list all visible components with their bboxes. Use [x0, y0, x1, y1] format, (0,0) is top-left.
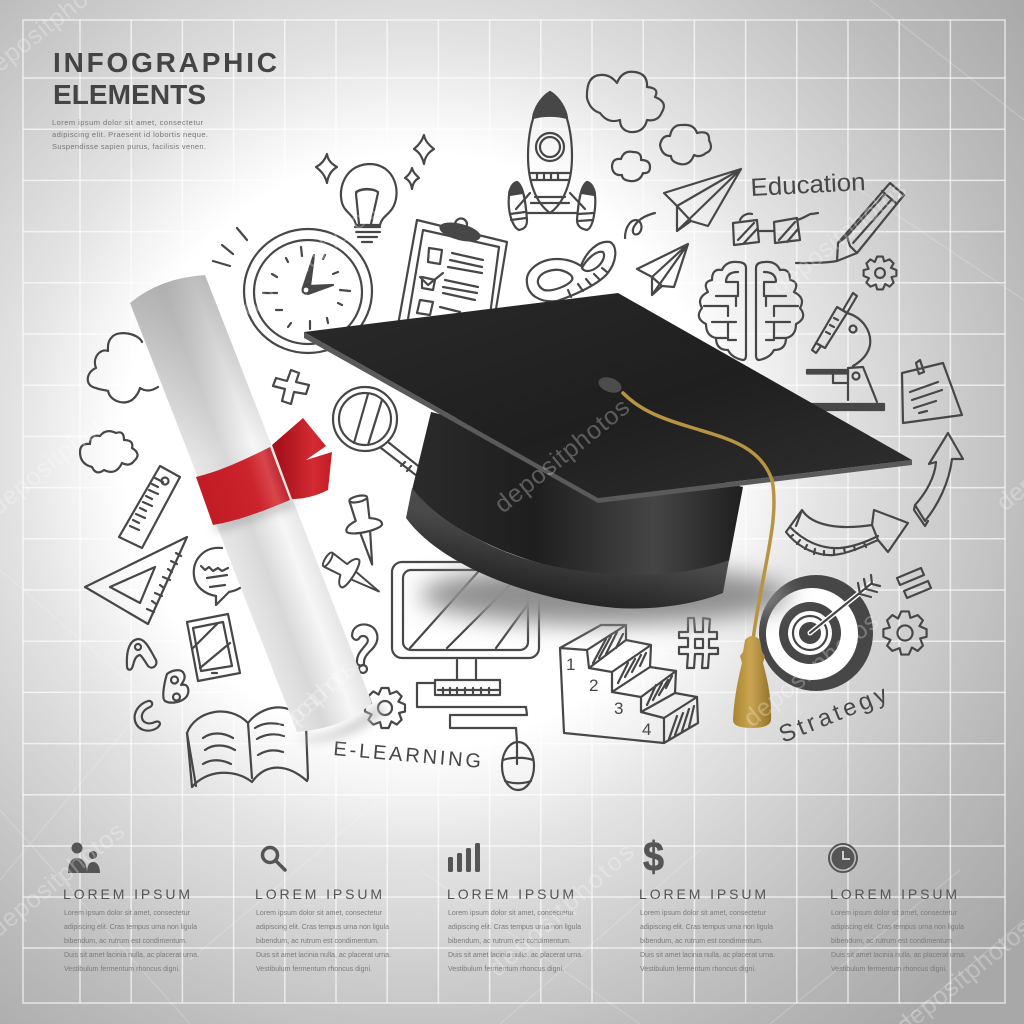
column 2: [255, 848, 391, 973]
heading 4: LOREM IPSUM: [639, 886, 766, 902]
icon: rocket: [509, 92, 595, 230]
icon: clock small: [829, 844, 857, 872]
intro text: Suspendisse sapien purus, facilisis venen.: [52, 142, 206, 151]
column 1: [63, 842, 199, 973]
heading 3: LOREM IPSUM: [447, 886, 574, 902]
body text 2: adipiscing elit. Cras tempus urna non ligula: [256, 924, 389, 931]
icon: cloud left: [88, 333, 158, 402]
cap body: [412, 412, 743, 577]
icon: paper plane large: [664, 169, 741, 231]
step numbers: 3: [614, 699, 623, 718]
cap board edge: [304, 332, 912, 503]
cap shadow: [420, 565, 790, 625]
body text 4: [640, 910, 775, 973]
icon: letter C: [135, 701, 160, 731]
body text 5: Lorem ipsum dolor sit amet, consectetur: [831, 910, 958, 917]
icon: sparkle top: [414, 135, 434, 164]
body text 3: adipiscing elit. Cras tempus urna non ligula: [448, 924, 581, 931]
body text 2: [256, 910, 391, 973]
icon: squiggle: [625, 213, 655, 238]
icon: dollar: $: [643, 833, 664, 880]
icon: pencil: [796, 183, 904, 263]
icon: cloud medium: [660, 125, 711, 164]
icon: push pin upright: [340, 492, 390, 568]
watermarks: depositphotos: [738, 607, 884, 733]
icon: gear right: [883, 611, 927, 655]
icon: glasses: [733, 213, 818, 245]
Education label: Education: [750, 168, 866, 202]
E-LEARNING label: E-LEARNING: [333, 738, 482, 773]
watermarks: depositphotos: [236, 197, 382, 323]
body text 5: bibendum, ac rutrum est condimentum.: [831, 938, 954, 945]
icon: push pin tilted: [317, 544, 388, 605]
body text 5: adipiscing elit. Cras tempus urna non ligula: [831, 924, 964, 931]
icon: lightbulb: [341, 164, 397, 242]
icon: signal bars: [448, 843, 480, 872]
icon: plus: [273, 370, 309, 404]
body text 4: bibendum, ac rutrum est condimentum.: [640, 938, 763, 945]
body text 4: adipiscing elit. Cras tempus urna non ligula: [640, 924, 773, 931]
body text 1: [64, 910, 199, 973]
icon: computer monitor: [392, 562, 539, 790]
icon: clipboard: [398, 218, 507, 325]
icon: set square: [85, 537, 187, 624]
icon: cloud top: [587, 72, 664, 132]
diploma scroll: [130, 275, 386, 742]
title: [53, 47, 277, 110]
Strategy label: Strategy: [775, 681, 891, 749]
ribbon band: [196, 447, 290, 525]
icon: speech bubble: [194, 548, 243, 605]
ribbon shadow: [213, 499, 296, 531]
step numbers: 1: [566, 655, 575, 674]
icon: arrow up: [914, 433, 963, 526]
body text 2: Duis sit amet lacinia nulla, ac placerat urna.: [256, 952, 391, 959]
column 5: [829, 844, 966, 973]
icon: microscope: [807, 293, 884, 410]
watermarks: depositphotos: [766, 175, 912, 301]
title: ELEMENTS: [53, 79, 206, 110]
body text 1: Vestibulum fermentum rhoncus digni.: [64, 966, 180, 973]
body text 1: adipiscing elit. Cras tempus urna non ligula: [64, 924, 197, 931]
watermarks: depositphotos: [489, 393, 635, 519]
bottom columns: [63, 833, 966, 973]
icon: gear top: [864, 257, 896, 289]
body text 4: Vestibulum fermentum rhoncus digni.: [640, 966, 756, 973]
icon: brain: [699, 262, 803, 360]
step numbers: [566, 655, 651, 739]
icon: question mark: [352, 624, 377, 673]
body text 3: Vestibulum fermentum rhoncus digni.: [448, 966, 564, 973]
body text 1: Lorem ipsum dolor sit amet, consectetur: [64, 910, 191, 917]
cord: [623, 393, 774, 640]
icon: gear centre-left: [365, 688, 405, 728]
body text 1: bibendum, ac rutrum est condimentum.: [64, 938, 187, 945]
icon: sticky note: [902, 360, 962, 423]
icon: curved arrow: [786, 510, 908, 555]
watermarks: depositphotos: [483, 838, 639, 982]
body text 3: [448, 910, 583, 973]
heading 5: LOREM IPSUM: [830, 886, 957, 902]
icon: spark lines: [213, 228, 247, 266]
doodles: [80, 72, 963, 790]
column 4: [639, 833, 775, 973]
icon: paper plane small: [637, 244, 688, 295]
icon: hash: [679, 618, 718, 668]
graduation cap: [304, 293, 912, 728]
icon: people: [68, 842, 100, 873]
icon: sparkle small: [405, 168, 419, 189]
icon: equals: [897, 568, 931, 598]
body text 2: Lorem ipsum dolor sit amet, consectetur: [256, 910, 383, 917]
intro text: [52, 118, 208, 151]
icon: target: [759, 575, 880, 691]
body text 1: Duis sit amet lacinia nulla, ac placerat urna.: [64, 952, 199, 959]
body text 4: Duis sit amet lacinia nulla, ac placerat urna.: [640, 952, 775, 959]
column 3: [447, 843, 583, 973]
tassel: [733, 636, 771, 728]
diploma shadow: [300, 703, 386, 742]
heading 1: LOREM IPSUM: [63, 886, 190, 902]
body text 5: Duis sit amet lacinia nulla, ac placerat urna.: [831, 952, 966, 959]
heading 2: LOREM IPSUM: [255, 886, 382, 902]
body text 2: bibendum, ac rutrum est condimentum.: [256, 938, 379, 945]
title: INFOGRAPHIC: [53, 47, 277, 78]
icon: letter B: [163, 670, 188, 703]
body text 5: Vestibulum fermentum rhoncus digni.: [831, 966, 947, 973]
body text 4: Lorem ipsum dolor sit amet, consectetur: [640, 910, 767, 917]
icon: sparkle left: [316, 154, 337, 183]
body text 3: bibendum, ac rutrum est condimentum.: [448, 938, 571, 945]
body text 3: Duis sit amet lacinia nulla, ac placerat urna.: [448, 952, 583, 959]
icon: stairs: [560, 625, 698, 743]
step numbers: 4: [642, 720, 651, 739]
icon: letter A: [127, 639, 156, 670]
intro text: adipiscing elit. Praesent id lobortis neque.: [52, 130, 208, 139]
intro text: Lorem ipsum dolor sit amet, consectetur: [52, 118, 204, 127]
body text 2: Vestibulum fermentum rhoncus digni.: [256, 966, 372, 973]
cap button: [596, 374, 624, 396]
icon: magnifier: [333, 387, 422, 476]
icon: open book: [187, 707, 308, 787]
body text 5: [831, 910, 966, 973]
icon: infinity loop: [527, 242, 615, 301]
icon: clock: [244, 229, 372, 353]
icon: cloud lower: [80, 431, 138, 472]
step numbers: 2: [589, 676, 598, 695]
cap board: [304, 293, 912, 498]
body text 3: Lorem ipsum dolor sit amet, consectetur: [448, 910, 575, 917]
cap band: [406, 488, 729, 608]
icon: tablet: [187, 614, 240, 681]
icon: ruler: [119, 466, 180, 548]
icon: search: [262, 848, 285, 870]
diploma roll: [130, 275, 372, 732]
icon: cloud small: [612, 152, 650, 181]
ribbon tail: [272, 418, 332, 499]
watermarks: depositphotos: [268, 655, 361, 742]
